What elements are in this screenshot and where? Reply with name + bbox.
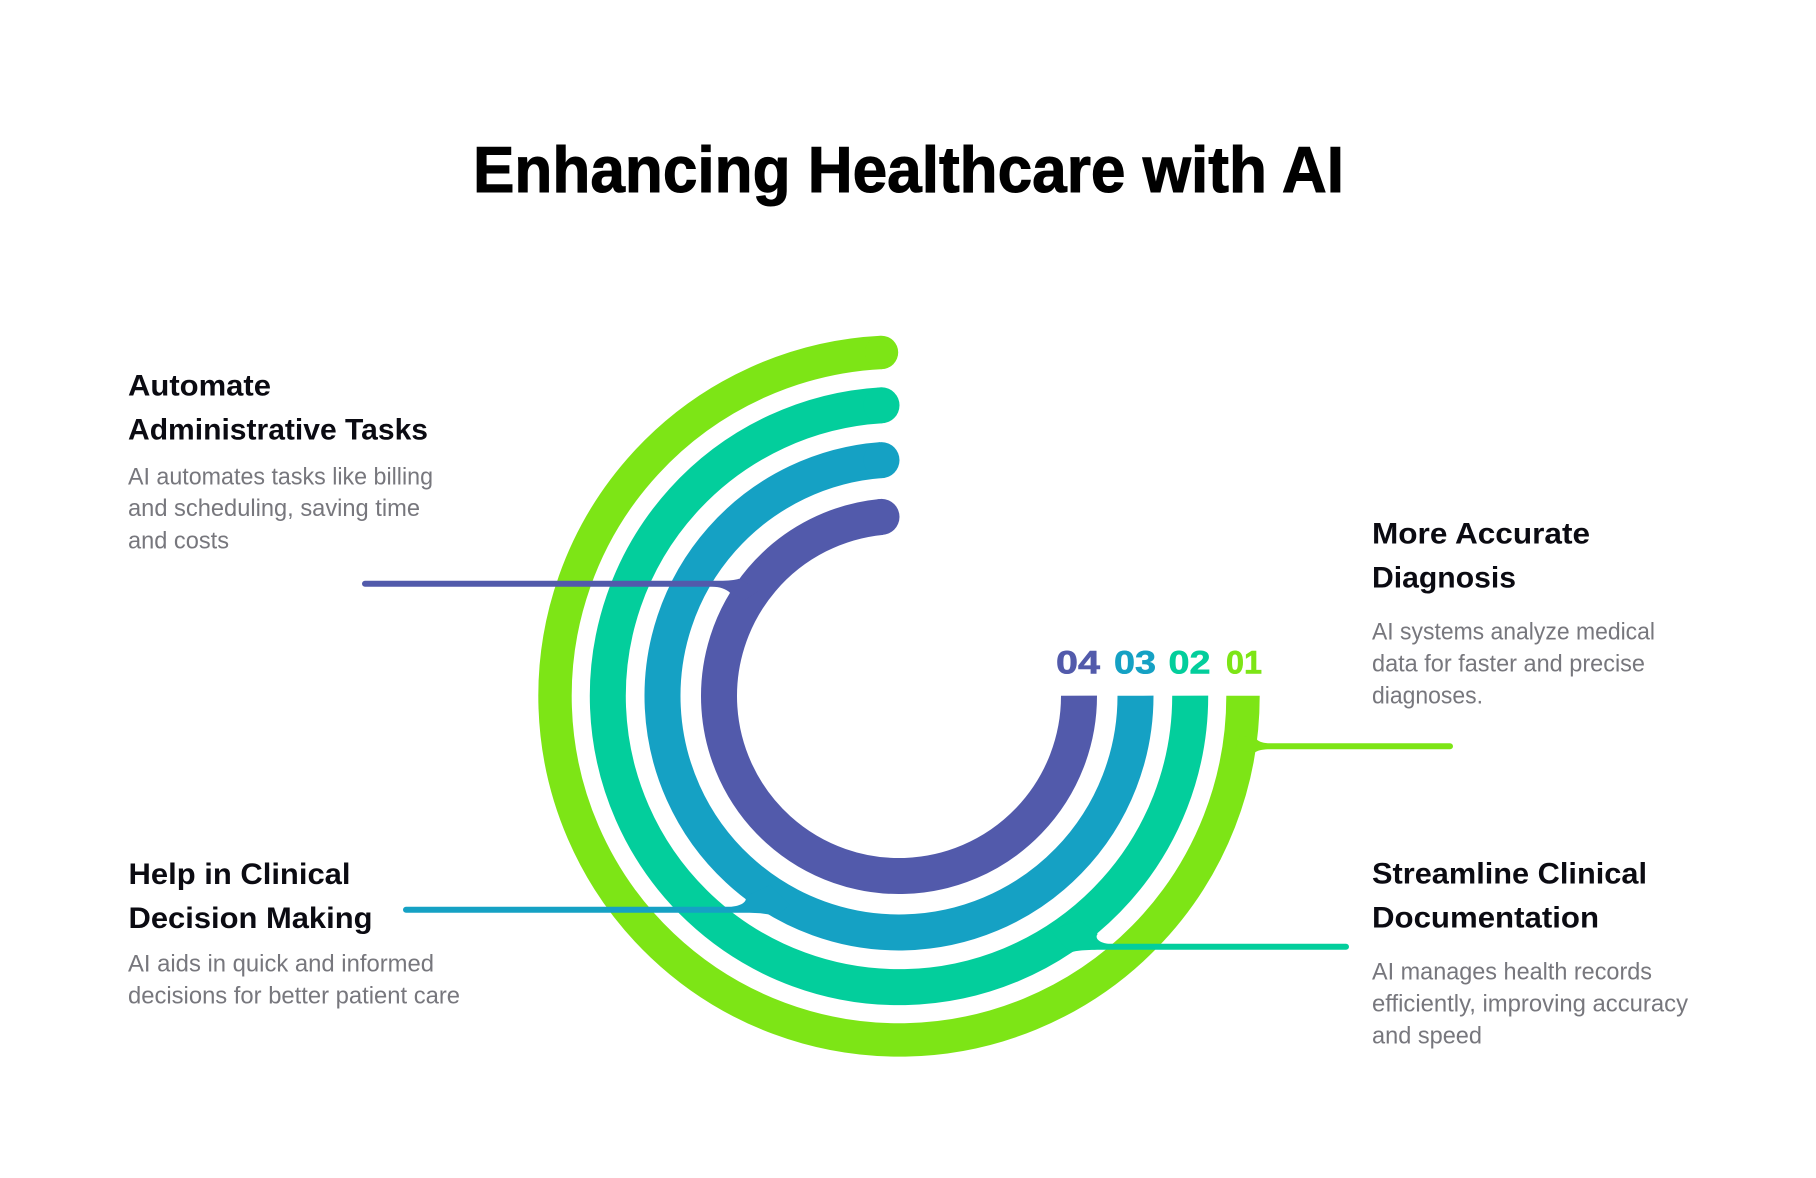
heading: More Accurate	[1372, 517, 1590, 550]
description: and scheduling, saving time	[128, 495, 420, 522]
arc 04: purple ring with leader	[362, 499, 1079, 876]
radial chart: four concentric arcs with leaders	[362, 336, 1453, 1040]
panel: automate administrative tasks	[128, 370, 433, 554]
arc 01: green ring with leader	[555, 336, 1453, 1040]
title: Enhancing Healthcare with AI	[473, 133, 1344, 206]
number 01: 01	[1226, 644, 1262, 680]
arc 02: teal ring with leader	[608, 387, 1349, 987]
panel: help in clinical decision making	[128, 858, 460, 1009]
description: AI manages health records	[1372, 958, 1652, 985]
description: decisions for better patient care	[128, 982, 460, 1009]
number 02: 02	[1168, 644, 1210, 680]
arc 03: blue ring with leader	[403, 442, 1136, 932]
description: AI automates tasks like billing	[128, 463, 433, 490]
description: and costs	[128, 527, 229, 554]
description: AI aids in quick and informed	[128, 951, 434, 978]
number 03: 03	[1114, 644, 1156, 680]
description: diagnoses.	[1372, 682, 1483, 709]
heading: Decision Making	[128, 902, 372, 935]
panel: more accurate diagnosis	[1372, 517, 1655, 709]
description: data for faster and precise	[1372, 651, 1645, 678]
panel: streamline clinical documentation	[1372, 857, 1688, 1049]
heading: Documentation	[1372, 901, 1599, 934]
heading: Diagnosis	[1372, 561, 1516, 594]
heading: Automate	[128, 370, 271, 403]
heading: Streamline Clinical	[1372, 857, 1647, 890]
step numbers	[1056, 644, 1262, 680]
description: AI systems analyze medical	[1372, 618, 1655, 645]
heading: Help in Clinical	[128, 858, 350, 891]
description: and speed	[1372, 1022, 1482, 1049]
number 04: 04	[1056, 644, 1100, 680]
description: efficiently, improving accuracy	[1372, 991, 1688, 1018]
heading: Administrative Tasks	[128, 413, 428, 446]
